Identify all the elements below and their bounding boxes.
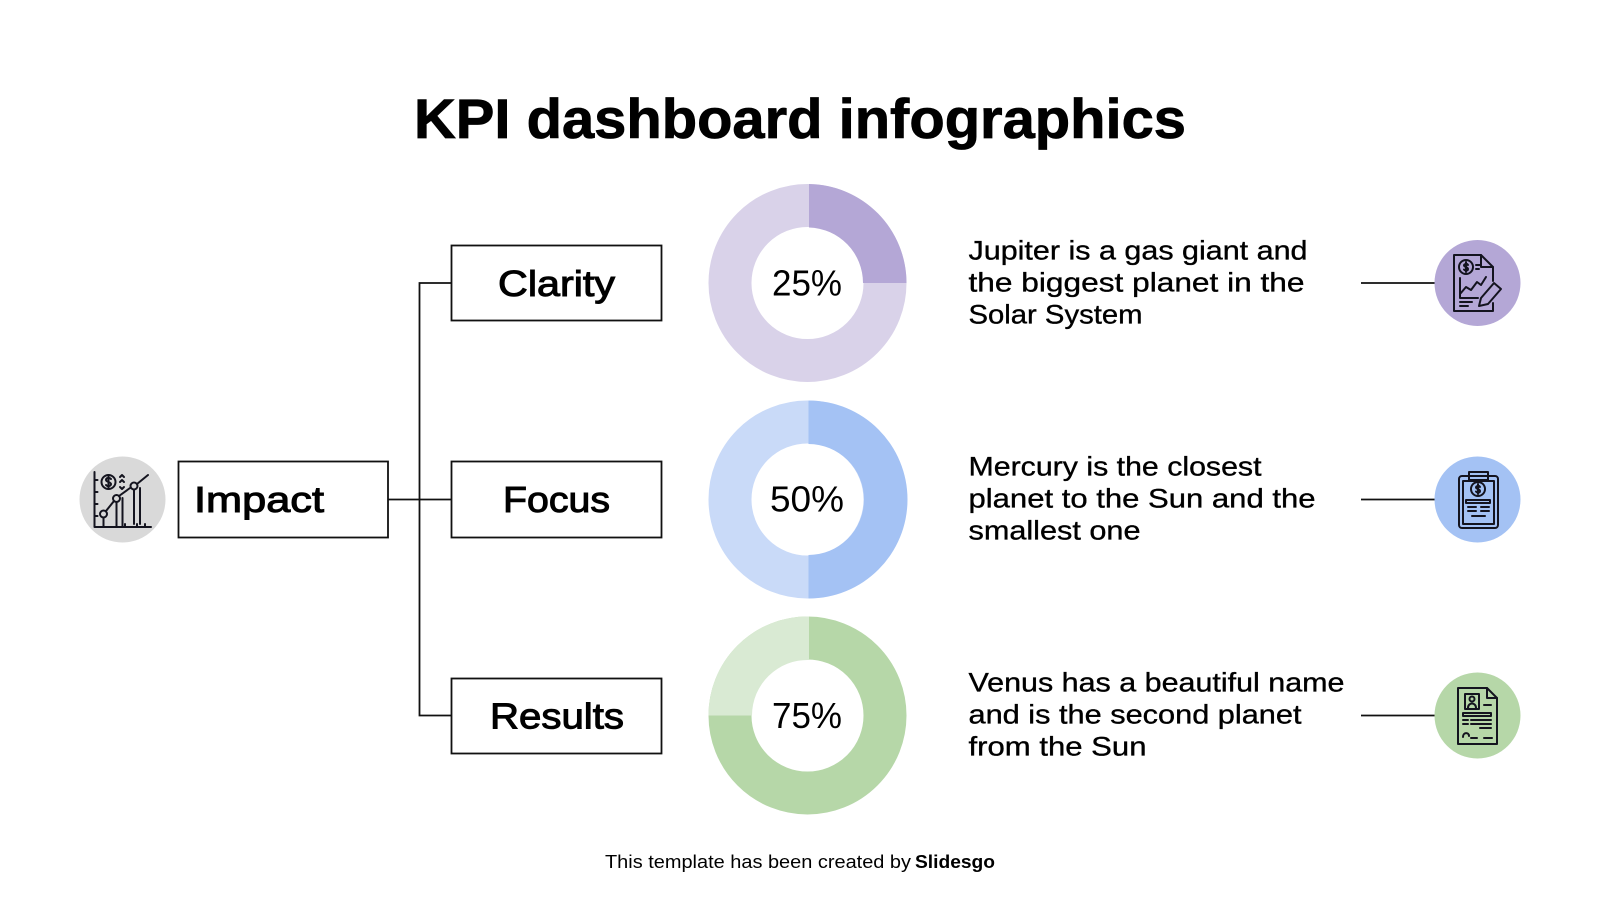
donut: 50% (730, 400, 908, 598)
donut: 75% (708, 616, 885, 793)
donut: 50%: 50% (770, 478, 844, 520)
text: Venus: from the Sun (968, 732, 1146, 762)
box: Focus (452, 462, 662, 538)
text: Venus (968, 668, 1344, 762)
footer credit: Slidesgo (915, 852, 995, 872)
box: Focus: Focus (503, 479, 610, 520)
text: Venus: Venus has a beautiful name (968, 668, 1344, 698)
footer credit: This template has been created by (605, 852, 911, 872)
box: Results: Results (490, 696, 624, 736)
connector tree (388, 283, 451, 716)
donut: 75%: 75% (772, 695, 842, 736)
icon: blue clipboard (1434, 456, 1520, 542)
box: Impact (178, 462, 388, 538)
donut: 25% (730, 184, 907, 360)
text: Jupiter: the biggest planet in the (968, 268, 1304, 298)
text: Mercury: planet to the Sun and the (968, 484, 1316, 514)
icon: impact chart (80, 456, 166, 542)
box: Clarity (452, 246, 662, 320)
icon: green document (1434, 672, 1520, 758)
text: Mercury (968, 452, 1316, 546)
connector lines to icons (1361, 283, 1435, 716)
text: Jupiter: Jupiter is a gas giant and (968, 236, 1308, 266)
title: KPI dashboard infographics (414, 87, 1186, 150)
icon: purple report (1434, 240, 1520, 326)
text: Jupiter (968, 236, 1308, 330)
donut: 25%: 25% (772, 262, 842, 304)
box: Impact: Impact (194, 479, 324, 520)
text: Mercury: Mercury is the closest (968, 452, 1262, 482)
box: Clarity: Clarity (498, 263, 615, 304)
text: Jupiter: Solar System (968, 300, 1142, 330)
text: Mercury: smallest one (968, 516, 1140, 546)
text: Venus: and is the second planet (968, 700, 1302, 730)
box: Results (452, 678, 662, 754)
